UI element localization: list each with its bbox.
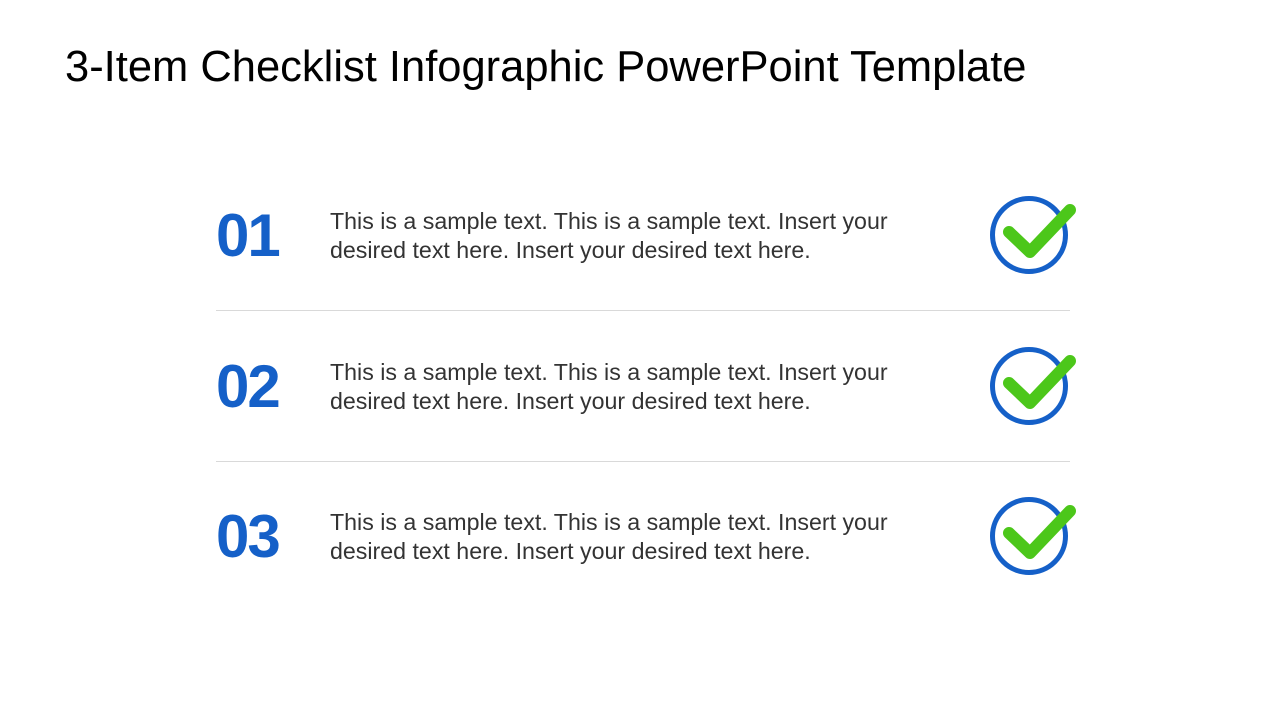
text 2: This is a sample text. This is a sample text. Insert your — [330, 359, 888, 385]
text 1: This is a sample text. This is a sample text. Insert your — [330, 208, 888, 234]
text 2 — [330, 359, 888, 414]
text 3 — [330, 509, 888, 564]
text 1: desired text here. Insert your desired text here. — [330, 237, 811, 263]
number 02: 02 — [216, 353, 279, 420]
row 1 — [216, 196, 1076, 274]
text 3: desired text here. Insert your desired text here. — [330, 538, 811, 564]
number 03: 03 — [216, 503, 279, 570]
number 01: 01 — [216, 202, 279, 269]
row 3 — [216, 497, 1076, 575]
row 2 — [216, 347, 1076, 425]
text 1 — [330, 208, 888, 263]
text 2: desired text here. Insert your desired text here. — [330, 388, 811, 414]
icon: check 3 — [990, 497, 1076, 575]
text 3: This is a sample text. This is a sample text. Insert your — [330, 509, 888, 535]
title: 3-Item Checklist Infographic PowerPoint Template — [65, 43, 1026, 91]
icon: check 1 — [990, 196, 1076, 274]
icon: check 2 — [990, 347, 1076, 425]
